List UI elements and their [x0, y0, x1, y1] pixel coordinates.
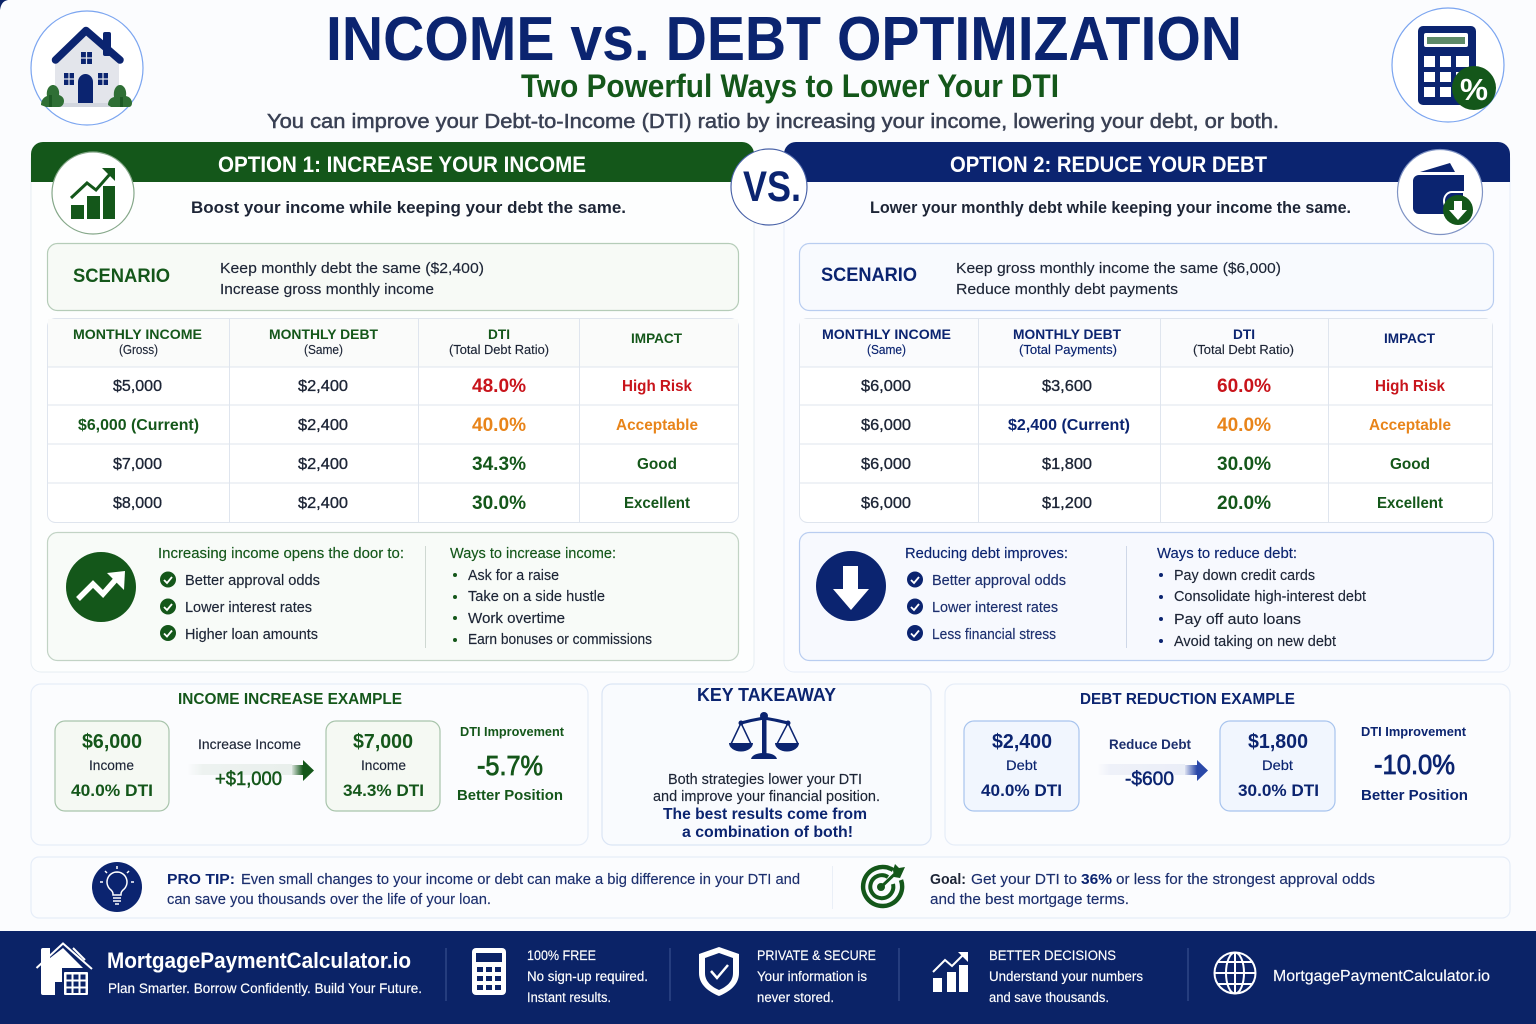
table: debt scenarios: MONTHLY DEBT — [1013, 326, 1121, 342]
scenario box: Increase gross monthly income — [220, 281, 434, 298]
option 1 heading: OPTION 1: INCREASE YOUR INCOME — [218, 152, 586, 177]
table: income scenarios: $5,000 — [113, 378, 162, 395]
icon: target — [863, 864, 905, 906]
table: debt scenarios: Good — [1390, 456, 1430, 473]
badge: VS: VS. — [743, 163, 801, 211]
pro tip text: Even small changes to your income or debt can make a big difference in your DTI and — [241, 871, 800, 888]
table: debt scenarios: 40.0% — [1217, 415, 1271, 436]
footer: private: never stored. — [757, 990, 834, 1005]
icon: globe — [1214, 952, 1256, 994]
panel: key takeaway — [602, 684, 931, 845]
panel: pro tip and goal — [31, 857, 1510, 918]
icon: rising bars — [52, 152, 134, 234]
result: dti improvement: Better Position — [457, 787, 563, 804]
panel: key takeaway: and improve your financial position. — [653, 789, 880, 805]
table: debt scenarios — [800, 318, 1492, 522]
table: debt scenarios: $3,600 — [1042, 378, 1092, 395]
before card: $6,000 — [82, 731, 142, 753]
goal text: 36% — [1081, 871, 1112, 888]
after card — [326, 721, 440, 811]
icon: calculator with percent: % — [1460, 72, 1488, 107]
arrow: increase income: Increase Income — [198, 736, 301, 752]
footer: private: Your information is — [757, 969, 867, 984]
table: debt scenarios: $6,000 — [861, 378, 911, 395]
panel: key takeaway: a combination of both! — [682, 824, 853, 841]
table: income scenarios: 34.3% — [472, 454, 526, 475]
table: income scenarios: IMPACT — [631, 330, 682, 346]
table: income scenarios: (Total Debt Ratio) — [449, 343, 549, 357]
table: debt scenarios: $6,000 — [861, 417, 911, 434]
table: debt scenarios: Acceptable — [1369, 417, 1451, 434]
after card — [1220, 721, 1335, 811]
icon: footer chart — [933, 952, 968, 992]
footer brand: Plan Smarter. Borrow Confidently. Build Your Future. — [108, 980, 422, 996]
intro sentence: You can improve your Debt-to-Income (DTI) ratio by increasing your income, lowering your debt, or both. — [267, 110, 1279, 133]
before card — [964, 721, 1079, 811]
table: income scenarios: MONTHLY DEBT — [269, 326, 378, 342]
badge: VS — [731, 149, 807, 225]
benefits box: debt — [800, 532, 1494, 660]
table: debt scenarios: $6,000 — [861, 495, 911, 512]
footer brand — [107, 948, 422, 996]
table: debt scenarios: (Total Payments) — [1019, 343, 1117, 357]
benefits box: income: Better approval odds — [185, 573, 320, 589]
panel: option 1 increase income — [31, 142, 754, 672]
before card: $2,400 — [992, 731, 1052, 753]
result: dti improvement: -10.0% — [1374, 749, 1455, 780]
scenario box: Reduce monthly debt payments — [956, 281, 1178, 298]
footer brand: MortgagePaymentCalculator.io — [107, 948, 411, 973]
panel: key takeaway: KEY TAKEAWAY — [697, 685, 836, 705]
table: debt scenarios: 20.0% — [1217, 493, 1271, 514]
table: debt scenarios: 30.0% — [1217, 454, 1271, 475]
table: income scenarios: Excellent — [624, 495, 691, 512]
scenario box: Keep gross monthly income the same ($6,000) — [956, 260, 1281, 277]
result: dti improvement — [457, 724, 565, 804]
benefits box: income — [48, 532, 738, 660]
result: dti improvement: DTI Improvement — [1361, 724, 1467, 739]
panel: income increase example: INCOME INCREASE EXAMPLE — [178, 691, 402, 708]
pro tip text — [167, 871, 800, 908]
table: debt scenarios: $1,200 — [1042, 495, 1092, 512]
icon: house — [31, 11, 143, 125]
icon: footer calculator — [472, 948, 506, 995]
table: income scenarios — [48, 318, 738, 522]
icon: calculator with percent — [1392, 8, 1504, 122]
panel: option 2 reduce debt — [784, 142, 1510, 672]
result: dti improvement: -5.7% — [477, 750, 543, 781]
result: dti improvement: Better Position — [1361, 787, 1468, 804]
benefits box: debt: Consolidate high-interest debt — [1174, 589, 1366, 605]
benefits box: debt: Pay down credit cards — [1174, 568, 1315, 584]
panel: key takeaway: Both strategies lower your DTI — [668, 772, 862, 788]
title: INCOME vs. DEBT OPTIMIZATION — [326, 5, 1242, 74]
benefits box: income: Earn bonuses or commissions — [468, 632, 652, 648]
goal text: Goal: — [930, 871, 966, 888]
after card: $1,800 — [1248, 731, 1308, 753]
table: income scenarios: $6,000 (Current) — [78, 417, 199, 434]
table: debt scenarios: IMPACT — [1384, 330, 1435, 346]
table: income scenarios: DTI — [488, 326, 510, 342]
arrow: reduce debt: Reduce Debt — [1109, 736, 1191, 752]
table: debt scenarios: $1,800 — [1042, 456, 1092, 473]
table: income scenarios: (Same) — [304, 343, 343, 357]
footer band — [0, 931, 1536, 1024]
before card: Income — [89, 757, 134, 773]
before card: Debt — [1006, 757, 1037, 773]
result: dti improvement — [1361, 724, 1468, 804]
table: income scenarios: 40.0% — [472, 415, 526, 436]
icon: balance scale — [729, 712, 799, 759]
footer: free: 100% FREE — [527, 948, 596, 963]
goal text — [930, 871, 1375, 908]
before card — [55, 721, 169, 811]
scenario box: Keep monthly debt the same ($2,400) — [220, 260, 484, 277]
option 2 summary: Lower your monthly debt while keeping your income the same. — [870, 198, 1351, 217]
goal text: and the best mortgage terms. — [930, 891, 1129, 908]
footer: free: Instant results. — [527, 990, 611, 1005]
footer: private — [757, 948, 876, 1005]
footer: private: PRIVATE & SECURE — [757, 948, 876, 963]
table: debt scenarios: (Total Debt Ratio) — [1193, 343, 1294, 357]
panel: debt reduction example: DEBT REDUCTION EXAMPLE — [1080, 691, 1295, 708]
benefits box: income: Ask for a raise — [468, 568, 559, 584]
table: income scenarios: $8,000 — [113, 495, 162, 512]
table: income scenarios: 48.0% — [472, 376, 526, 397]
after card: 30.0% DTI — [1238, 781, 1319, 800]
table: income scenarios: Acceptable — [616, 417, 698, 434]
table: income scenarios: $2,400 — [298, 456, 348, 473]
footer: better decisions — [989, 948, 1143, 1005]
arrow: increase income — [187, 736, 314, 790]
table: debt scenarios: High Risk — [1375, 378, 1445, 395]
benefits box: debt: Avoid taking on new debt — [1174, 634, 1336, 650]
footer: free — [527, 948, 648, 1005]
table: income scenarios: $7,000 — [113, 456, 162, 473]
benefits box: income: Lower interest rates — [185, 600, 312, 616]
icon: footer shield — [699, 947, 739, 996]
panel: debt reduction example — [945, 684, 1510, 845]
icon: footer house — [36, 944, 92, 995]
table: debt scenarios: (Same) — [867, 343, 906, 357]
footer: better decisions: and save thousands. — [989, 990, 1109, 1005]
table: income scenarios: (Gross) — [119, 343, 158, 357]
benefits box: debt: Better approval odds — [932, 573, 1066, 589]
goal text: Get your DTI to — [971, 871, 1077, 888]
subtitle: Two Powerful Ways to Lower Your DTI — [521, 68, 1059, 104]
table: debt scenarios: $6,000 — [861, 456, 911, 473]
table: debt scenarios: DTI — [1233, 326, 1255, 342]
table: debt scenarios: MONTHLY INCOME — [822, 326, 951, 342]
pro tip text: PRO TIP: — [167, 871, 235, 888]
before card: 40.0% DTI — [981, 781, 1062, 800]
table: debt scenarios: $2,400 (Current) — [1008, 417, 1130, 434]
table: income scenarios: MONTHLY INCOME — [73, 326, 202, 342]
pro tip text: can save you thousands over the life of your loan. — [167, 891, 491, 908]
benefits box: debt: Lower interest rates — [932, 600, 1058, 616]
table: income scenarios: $2,400 — [298, 417, 348, 434]
benefits box: income: Higher loan amounts — [185, 627, 318, 643]
footer: better decisions: BETTER DECISIONS — [989, 948, 1116, 963]
result: dti improvement: DTI Improvement — [460, 724, 565, 739]
after card: Debt — [1262, 757, 1293, 773]
after card: Income — [361, 757, 406, 773]
scenario box — [800, 244, 1494, 310]
option 1 summary: Boost your income while keeping your debt the same. — [191, 198, 626, 217]
benefits box: debt: Pay off auto loans — [1174, 612, 1301, 628]
footer: free: No sign-up required. — [527, 969, 648, 984]
goal text: or less for the strongest approval odds — [1116, 871, 1375, 888]
arrow: reduce debt: -$600 — [1125, 769, 1174, 790]
footer: better decisions: Understand your numbers — [989, 969, 1143, 984]
icon: wallet — [1398, 150, 1482, 234]
arrow: reduce debt — [1097, 736, 1208, 790]
table: income scenarios: Good — [637, 456, 677, 473]
option 2 heading: OPTION 2: REDUCE YOUR DEBT — [950, 152, 1268, 177]
table: debt scenarios: Excellent — [1377, 495, 1444, 512]
benefits box: income: Ways to increase income: — [450, 546, 616, 562]
panel: income increase example — [31, 684, 588, 845]
after card: 34.3% DTI — [343, 781, 424, 800]
scenario box — [48, 244, 738, 310]
table: debt scenarios: 60.0% — [1217, 376, 1271, 397]
table: income scenarios: High Risk — [622, 378, 692, 395]
arrow: increase income: +$1,000 — [215, 769, 282, 790]
table: income scenarios: $2,400 — [298, 495, 348, 512]
footer website: MortgagePaymentCalculator.io — [1273, 968, 1490, 985]
panel: key takeaway: The best results come from — [663, 806, 867, 823]
benefits box: debt: Ways to reduce debt: — [1157, 546, 1297, 562]
table: income scenarios: 30.0% — [472, 493, 526, 514]
icon: light bulb — [92, 862, 142, 912]
benefits box: income: Work overtime — [468, 611, 565, 627]
benefits box: income: Increasing income opens the door to: — [158, 546, 404, 562]
scenario box: SCENARIO — [821, 265, 917, 286]
benefits box: debt: Reducing debt improves: — [905, 546, 1068, 562]
benefits box: income: Take on a side hustle — [468, 589, 605, 605]
after card: $7,000 — [353, 731, 413, 753]
table: income scenarios: $2,400 — [298, 378, 348, 395]
scenario box: SCENARIO — [73, 266, 170, 287]
benefits box: debt: Less financial stress — [932, 627, 1056, 643]
before card: 40.0% DTI — [71, 781, 153, 800]
